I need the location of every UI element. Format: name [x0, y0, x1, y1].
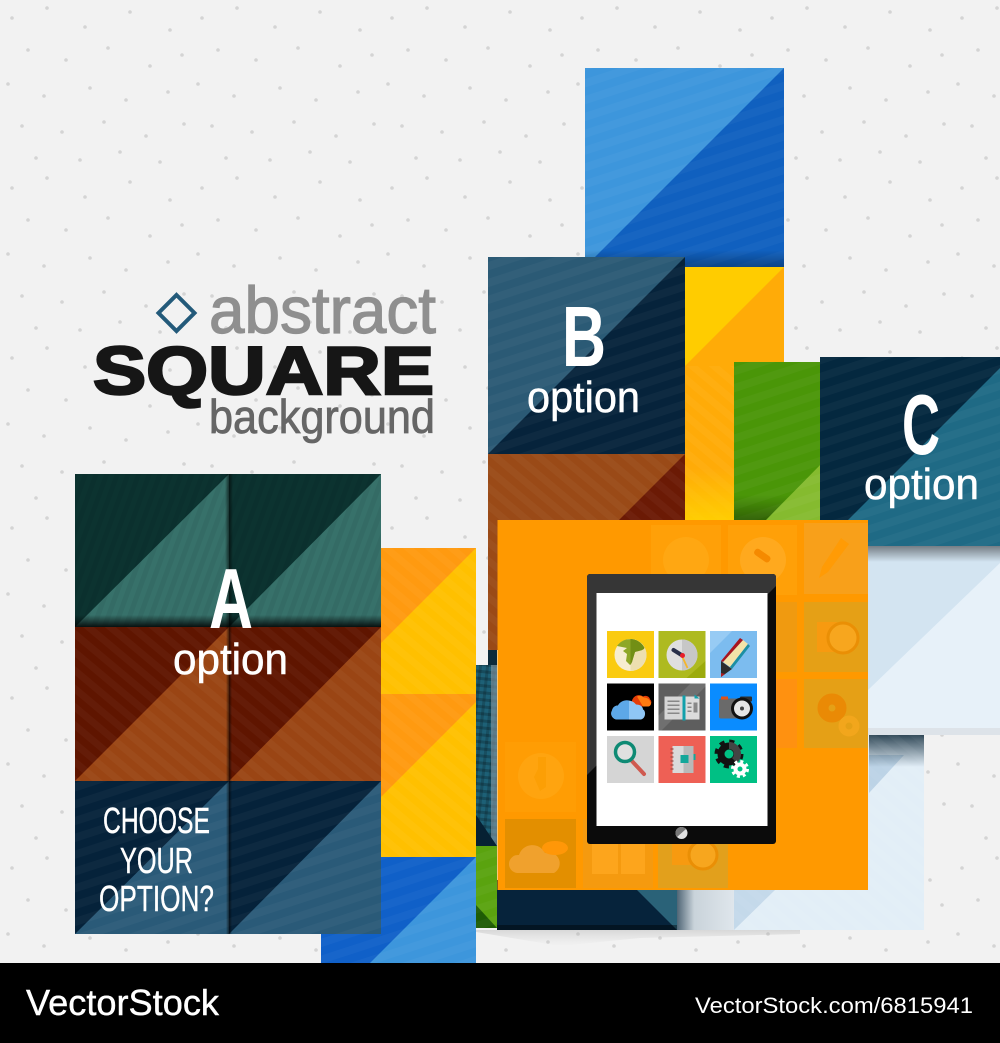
panel: blue lower left [321, 857, 476, 963]
panel: yellow orange column [685, 267, 784, 520]
icon: magnifier [607, 736, 654, 783]
panel: brown block under B [488, 454, 685, 665]
row: teal triangles [75, 474, 381, 627]
label: B option: option [527, 373, 640, 422]
icon: camera [710, 684, 757, 730]
label: A option: option [173, 635, 288, 684]
icon: clock [658, 631, 706, 678]
panel: C block [820, 357, 1000, 546]
panel: dark bottom strip [497, 880, 734, 930]
title line: SQUARE: SQUARE [93, 333, 434, 409]
icon: globe [607, 631, 654, 678]
panel: A option grid [75, 474, 381, 934]
panel: orange tablet card [498, 520, 868, 890]
ghost icon tiles [505, 523, 868, 888]
footer bar [0, 963, 1000, 1043]
icon: notebook [658, 736, 706, 783]
letter C: C [902, 378, 940, 473]
icon: cloud [607, 684, 654, 730]
letter B: B [562, 290, 606, 385]
text: choose your option: OPTION? [99, 878, 214, 919]
panel: B square [488, 257, 685, 454]
text: choose your option: CHOOSE [103, 800, 210, 841]
text: choose your option: YOUR [120, 840, 193, 881]
icon: gears [710, 736, 757, 783]
letter A: A [209, 552, 253, 647]
panel: pale blue lower block [734, 735, 924, 930]
home button [675, 827, 688, 839]
panel: teal strip [476, 665, 497, 846]
icon: diamond [158, 295, 194, 331]
panel: pale blue block under C [868, 546, 1000, 735]
text: choose your option [99, 800, 214, 919]
icon: open book [658, 684, 706, 730]
panel: yellow left column [381, 548, 476, 857]
panel: small green strip [476, 846, 497, 928]
title block [93, 273, 436, 443]
image id: VectorStock.com/6815941 [695, 993, 973, 1018]
tablet [587, 574, 776, 844]
row: navy triangles [75, 781, 381, 934]
title line: background: background [209, 390, 435, 443]
label: C option: option [864, 460, 979, 509]
panel: top blue square [585, 68, 784, 267]
panel: green block [734, 362, 824, 520]
decorative wisp shadows below strip [476, 930, 800, 946]
row: brown triangles [75, 627, 381, 781]
title line: abstract: abstract [209, 273, 436, 347]
logo text: VectorStock [26, 982, 220, 1023]
icon: pencil [710, 631, 757, 678]
